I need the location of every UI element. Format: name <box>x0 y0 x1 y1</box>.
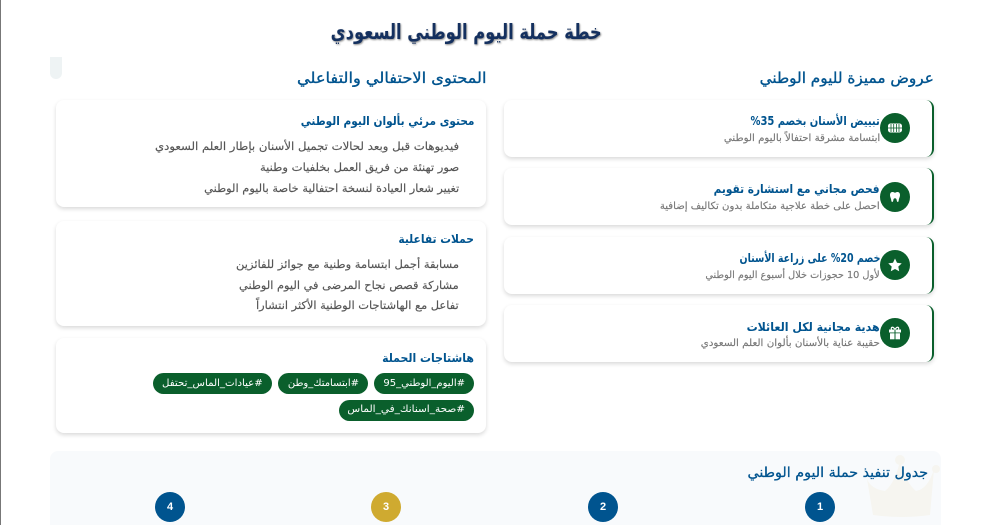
panel: offer 1 <box>504 100 934 157</box>
icon: tooth <box>880 182 910 212</box>
icon: teeth <box>880 113 910 143</box>
heading: content: المحتوى الاحتفالي والتفاعلي <box>296 69 486 87</box>
hashtag 4 <box>339 400 474 421</box>
step 4: 4 <box>167 501 173 513</box>
campaigns heading: حملات تفاعلية <box>398 232 474 246</box>
panel: hashtags <box>56 338 486 433</box>
step 3 <box>371 492 401 522</box>
offer 1 title: تبييض الأسنان بخصم 35% <box>751 114 880 128</box>
step 3: 3 <box>383 501 389 513</box>
hashtag 4: #صحة_اسنانك_في_الماس <box>347 404 465 415</box>
step 2 <box>588 492 618 522</box>
panel: offer 2 <box>504 168 934 225</box>
step 4 <box>155 492 185 522</box>
visual content heading: محتوى مرئي بألوان اليوم الوطني <box>300 114 474 128</box>
visual content item 3: تغيير شعار العيادة لنسخة احتفالية خاصة باليوم الوطني <box>204 182 459 195</box>
heading: offers: عروض مميزة لليوم الوطني <box>760 69 934 87</box>
hashtag 1 <box>374 373 474 394</box>
hashtag 2: #ابتسامتك_وطن <box>288 378 359 389</box>
schedule heading: جدول تنفيذ حملة اليوم الوطني <box>747 465 928 481</box>
visual content item 1: فيديوهات قبل وبعد لحالات تجميل الأسنان بإطار العلم السعودي <box>155 140 459 153</box>
campaigns item 2: مشاركة قصص نجاح المرضى في اليوم الوطني <box>239 279 459 292</box>
step 2: 2 <box>600 501 606 513</box>
icon: gift <box>880 318 910 348</box>
visual content item 2: صور تهنئة من فريق العمل بخلفيات وطنية <box>260 161 459 174</box>
hashtags heading: هاشتاجات الحملة <box>382 351 474 365</box>
icon: star <box>880 250 910 280</box>
hashtag 3 <box>153 373 272 394</box>
hashtag 1: #اليوم_الوطني_95 <box>383 378 465 389</box>
campaigns item 3: تفاعل مع الهاشتاجات الوطنية الأكثر انتشاراً <box>256 299 459 312</box>
offer 3 title: خصم 20% على زراعة الأسنان <box>739 251 880 265</box>
left edge line <box>0 0 1 525</box>
panel: interactive campaigns <box>56 221 486 326</box>
title: خطة حملة اليوم الوطني السعودي <box>331 20 602 44</box>
offer 2 description: احصل على خطة علاجية متكاملة بدون تكاليف إضافية <box>660 201 880 212</box>
step 1: 1 <box>817 501 823 513</box>
hashtag 2 <box>278 373 368 394</box>
offer 4 description: حقيبة عناية بالأسنان بألوان العلم السعودي <box>701 338 880 349</box>
step 1 <box>805 492 835 522</box>
campaigns item 1: مسابقة أجمل ابتسامة وطنية مع جوائز للفائزين <box>236 258 459 271</box>
offer 3 description: لأول 10 حجوزات خلال أسبوع اليوم الوطني <box>706 270 880 281</box>
hashtag 3: #عيادات_الماس_تحتفل <box>162 378 263 389</box>
offer 4 title: هدية مجانية لكل العائلات <box>747 320 880 334</box>
decorative tab <box>50 57 62 79</box>
offer 1 description: ابتسامة مشرقة احتفالاً باليوم الوطني <box>724 133 880 144</box>
decorative crown <box>868 455 940 517</box>
offer 2 title: فحص مجاني مع استشارة تقويم <box>714 182 880 196</box>
panel: schedule <box>50 451 941 525</box>
panel: offer 3 <box>504 237 934 294</box>
panel: offer 4 <box>504 305 934 362</box>
panel: visual content <box>56 100 486 207</box>
